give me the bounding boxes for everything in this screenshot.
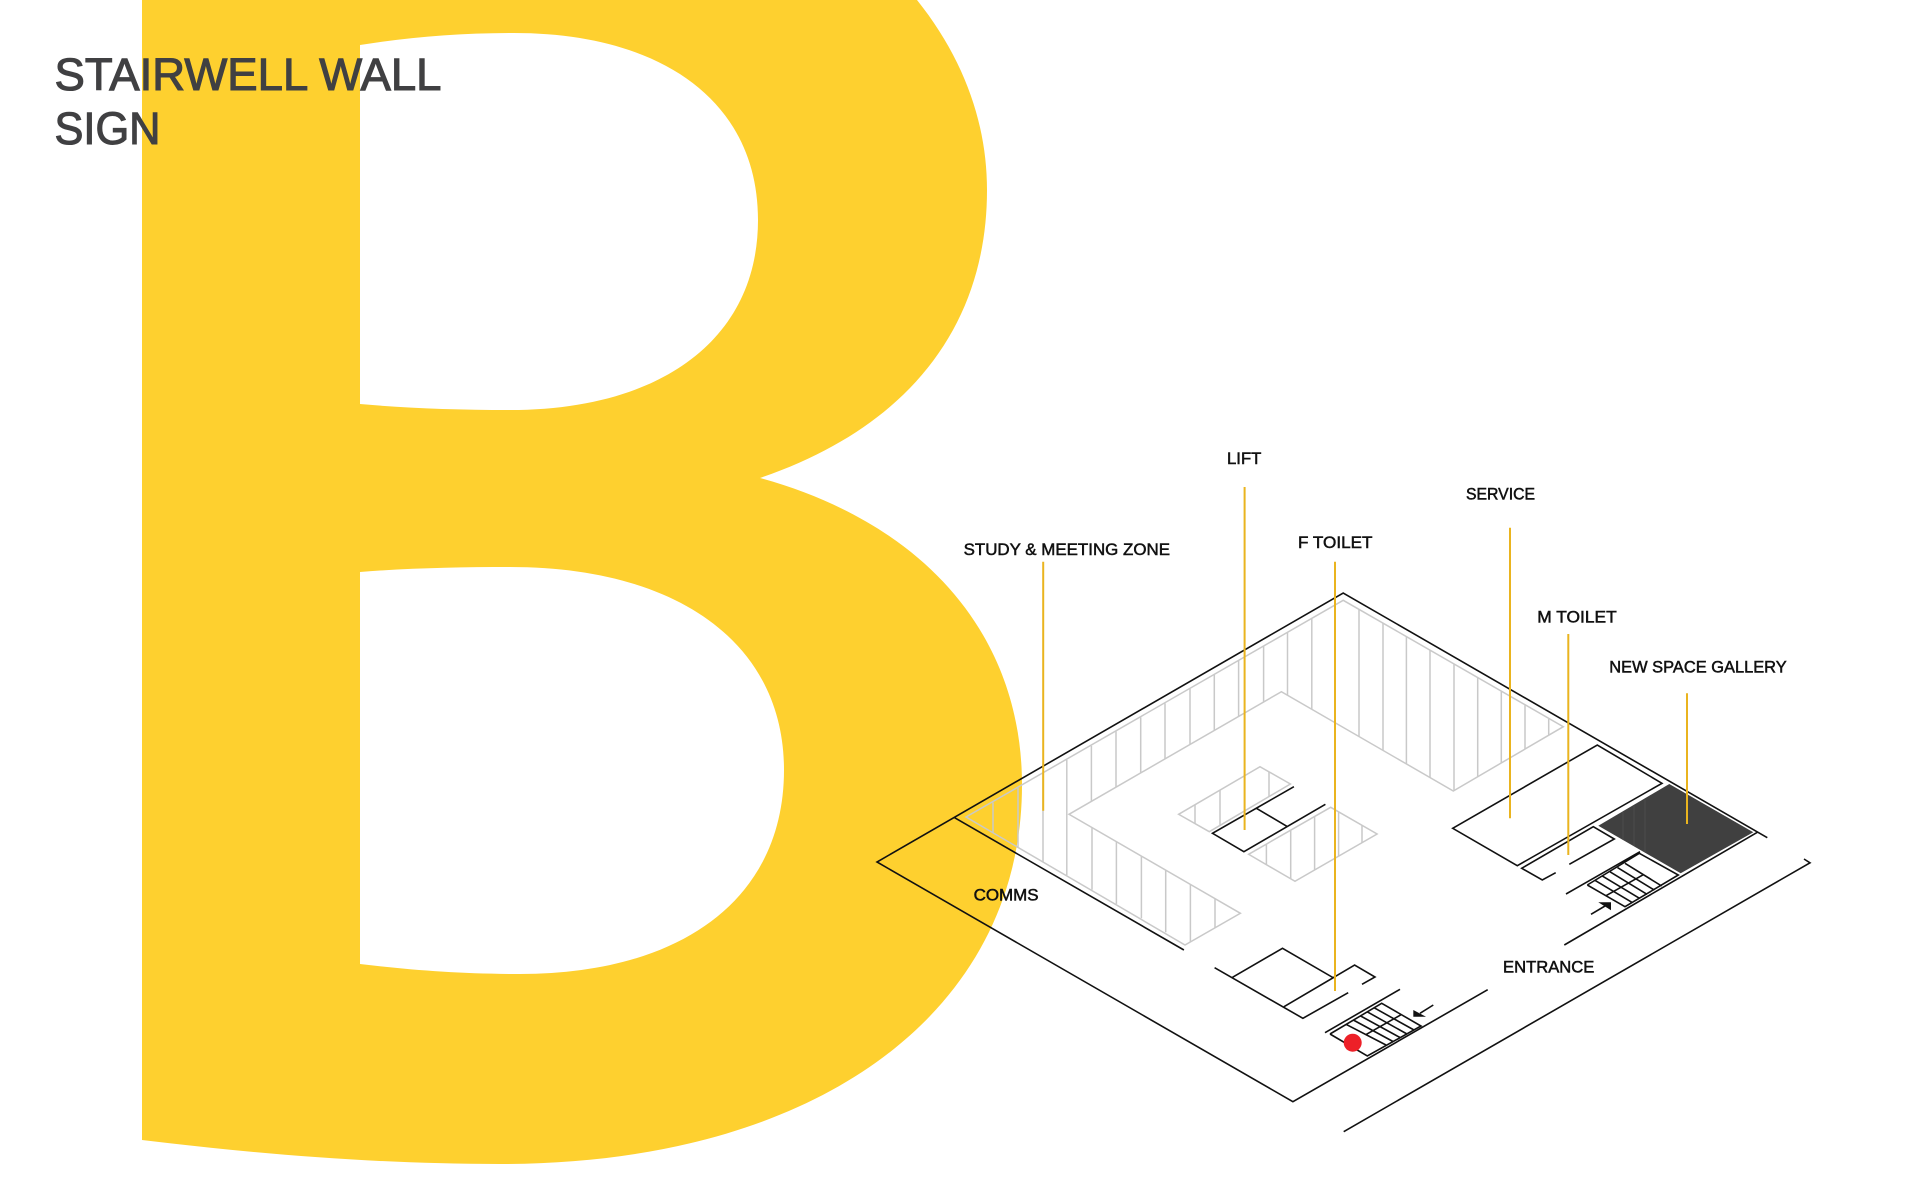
leader lines: [1043, 487, 1687, 991]
new space gallery dark floor: [1598, 784, 1753, 873]
title: [54, 49, 442, 154]
title: STAIRWELL WALL: [54, 49, 442, 100]
label: new space gallery: NEW SPACE GALLERY: [1609, 659, 1787, 677]
title: SIGN: [54, 103, 160, 154]
outer building walls: [877, 593, 1810, 1132]
female toilet room: [1215, 948, 1375, 1018]
arrow: rear stairs: [1591, 902, 1611, 914]
isometric floor plan: [877, 593, 1810, 1132]
red location marker: [1344, 1034, 1362, 1052]
male toilet room: [1522, 827, 1614, 880]
lift shaft upper void: [1179, 767, 1290, 832]
rear stairs: [1566, 852, 1678, 907]
service room: [1453, 745, 1662, 866]
grey void outline with wall panels: [966, 600, 1563, 945]
label: m toilet: M TOILET: [1537, 609, 1617, 627]
label: study and meeting zone: STUDY & MEETING ZONE: [964, 541, 1170, 559]
front stairs: [1325, 989, 1421, 1056]
lift: [1212, 787, 1325, 852]
lift shaft lower void: [1249, 807, 1377, 881]
giant yellow letter B: [142, 0, 1022, 1164]
label: service: SERVICE: [1466, 485, 1535, 503]
label: comms: COMMS: [974, 887, 1039, 905]
label: lift: LIFT: [1227, 450, 1261, 468]
label: f toilet: F TOILET: [1298, 534, 1372, 552]
label: entrance: ENTRANCE: [1503, 958, 1594, 976]
arrow: front stairs: [1413, 1005, 1433, 1017]
